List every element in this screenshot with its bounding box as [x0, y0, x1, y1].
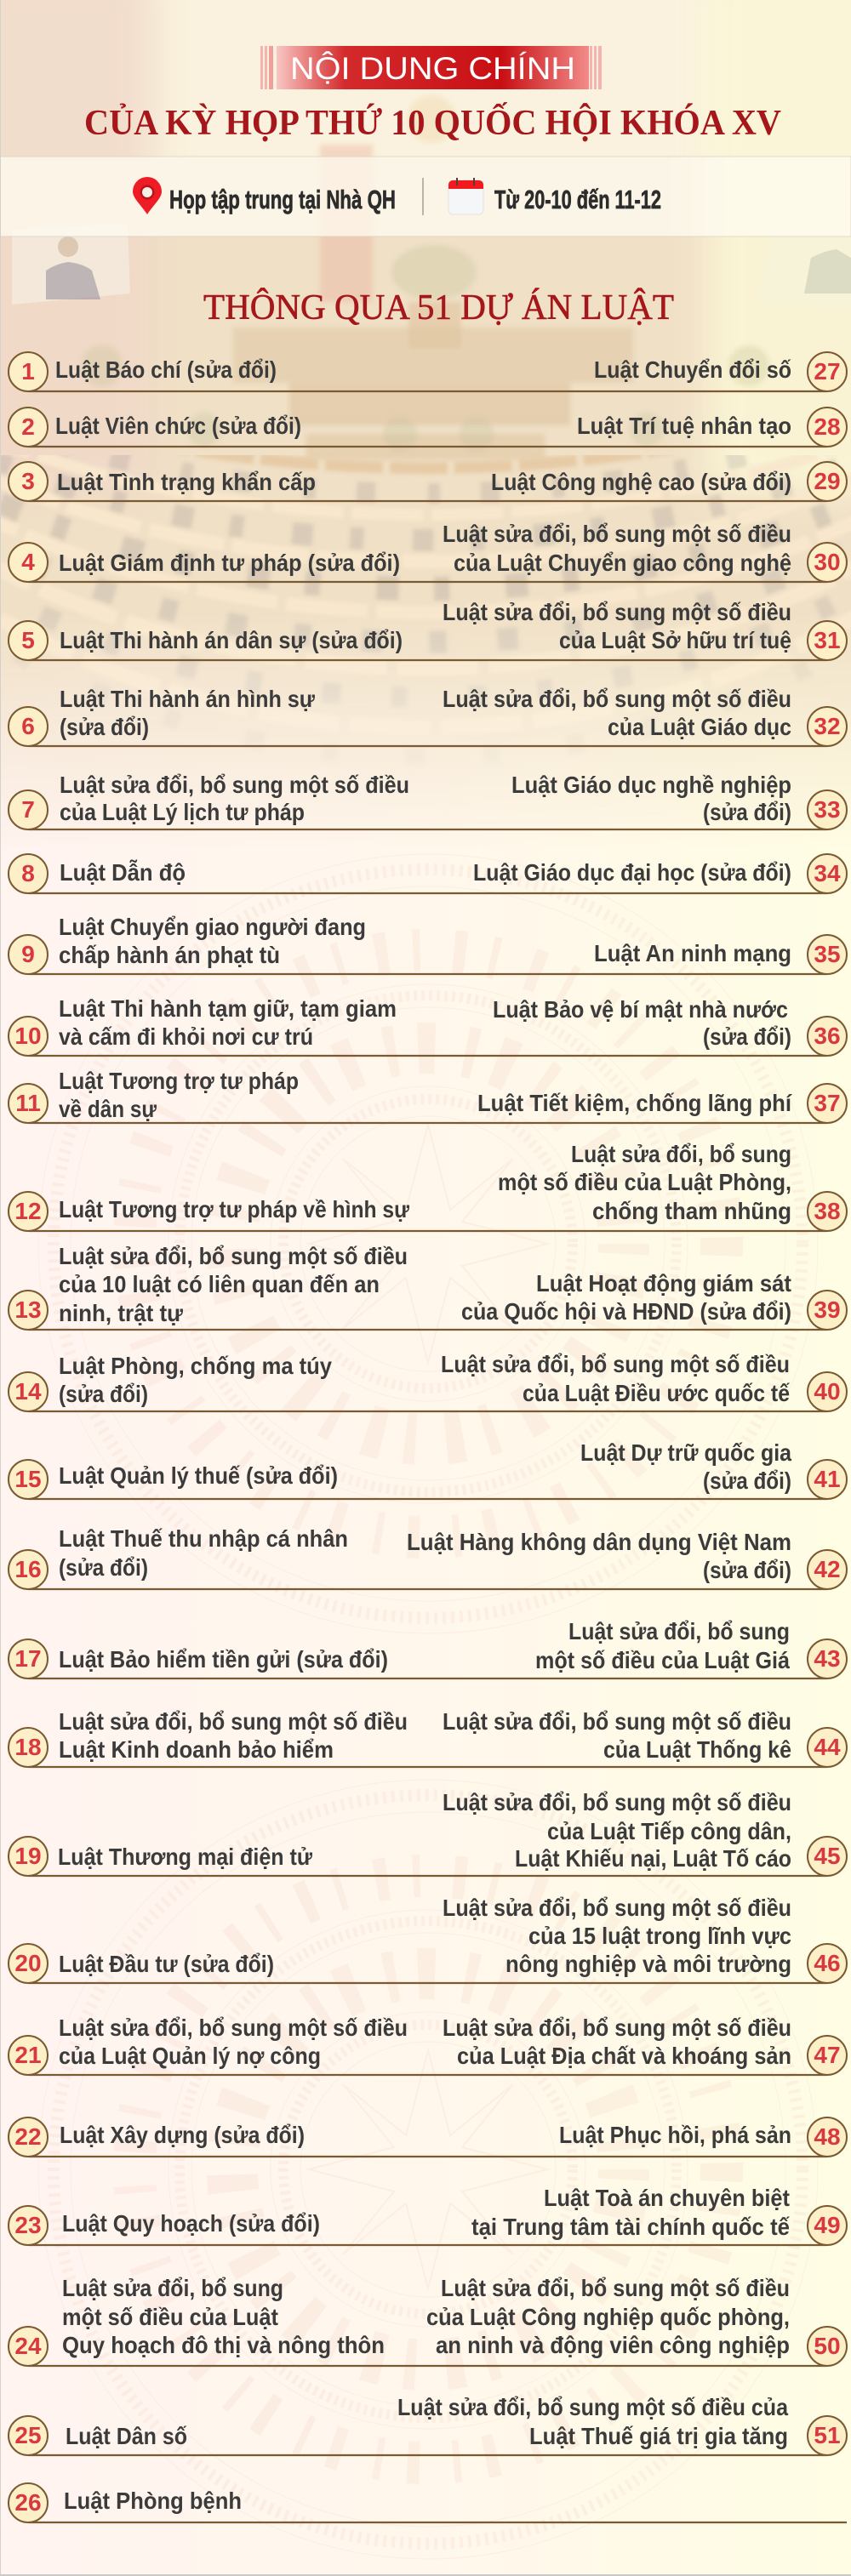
law 26: Luật Phòng bệnh: [64, 2488, 242, 2514]
law 24: 24: [14, 2333, 42, 2359]
law 32: Luật sửa đổi, bổ sung một số điều: [443, 686, 791, 712]
law 24: Quy hoạch đô thị và nông thôn: [62, 2332, 385, 2358]
law 44: Luật sửa đổi, bổ sung một số điều: [443, 1708, 791, 1735]
law 5: 5: [21, 627, 35, 653]
law 9: 9: [21, 941, 35, 967]
law 28: [577, 407, 847, 447]
law 50: [426, 2275, 847, 2366]
law 14: 14: [14, 1378, 42, 1405]
law 2: [9, 407, 301, 447]
law 18: Luật sửa đổi, bổ sung một số điều: [59, 1708, 408, 1735]
law 33: (sửa đổi): [703, 799, 791, 825]
row: laws 6 and 32: [9, 686, 847, 746]
law 45: 45: [814, 1843, 841, 1869]
law 28: 28: [814, 413, 841, 440]
section heading: THÔNG QUA 51 DỰ ÁN LUẬT: [203, 288, 674, 328]
law 38: [498, 1141, 847, 1231]
law 30: [443, 521, 847, 582]
law 21: 21: [14, 2042, 42, 2068]
location text: Họp tập trung tại Nhà QH: [169, 185, 396, 214]
law 51: Luật sửa đổi, bổ sung một số điều của: [397, 2394, 789, 2420]
law 21: [9, 2015, 408, 2075]
law 39: 39: [814, 1297, 841, 1323]
law 48: 48: [814, 2123, 841, 2150]
law 9: Luật Chuyển giao người đang: [59, 914, 366, 940]
header banner: NỘI DUNG CHÍNH: [290, 51, 575, 86]
law 23: Luật Quy hoạch (sửa đổi): [62, 2210, 320, 2237]
law 14: (sửa đổi): [59, 1381, 148, 1407]
background: bronze drum patterns: [38, 854, 818, 2559]
law 48: Luật Phục hồi, phá sản: [559, 2122, 791, 2148]
law 16: (sửa đổi): [59, 1554, 148, 1581]
law 41: 41: [814, 1466, 841, 1492]
law 34: 34: [814, 860, 841, 886]
row: laws 11 and 37: [9, 1068, 847, 1123]
law 22: 22: [14, 2123, 42, 2150]
law 18: Luật Kinh doanh bảo hiểm: [59, 1736, 334, 1763]
row: laws 13 and 39: [9, 1243, 847, 1330]
law 44: 44: [814, 1734, 841, 1760]
law 49: tại Trung tâm tài chính quốc tế: [471, 2214, 791, 2240]
law 51: 51: [814, 2422, 841, 2448]
law 37: Luật Tiết kiệm, chống lãng phí: [477, 1090, 792, 1116]
row: laws 24 and 50: [9, 2275, 847, 2366]
law 4: 4: [21, 549, 35, 575]
law 12: Luật Tương trợ tư pháp về hình sự: [59, 1196, 409, 1222]
law 31: 31: [814, 627, 841, 653]
law 12: [9, 1192, 409, 1231]
law 36: Luật Bảo vệ bí mật nhà nước: [493, 996, 788, 1023]
law 19: [9, 1837, 312, 1876]
law 20: [9, 1944, 274, 1983]
row: laws 10 and 36: [9, 995, 847, 1056]
law 10: và cấm đi khỏi nơi cư trú: [59, 1023, 313, 1050]
row: laws 9 and 35: [9, 914, 847, 974]
law 7: Luật sửa đổi, bổ sung một số điều: [60, 772, 409, 798]
law 17: [9, 1639, 388, 1678]
law 26: 26: [14, 2489, 42, 2516]
law 46: Luật sửa đổi, bổ sung một số điều: [443, 1895, 791, 1921]
date text: Từ 20-10 đến 11-12: [494, 185, 661, 214]
law 3: Luật Tình trạng khẩn cấp: [57, 469, 316, 495]
law 34: Luật Giáo dục đại học (sửa đổi): [473, 859, 791, 886]
law 24: [9, 2275, 385, 2366]
law 49: Luật Toà án chuyên biệt: [544, 2185, 790, 2211]
law 15: [9, 1460, 338, 1499]
row: laws 4 and 30: [9, 521, 847, 582]
law 16: 16: [14, 1556, 42, 1582]
law 32: [443, 686, 847, 746]
law 15: Luật Quản lý thuế (sửa đổi): [59, 1462, 338, 1489]
law 43: Luật sửa đổi, bổ sung: [568, 1618, 790, 1644]
law 2: 2: [21, 413, 35, 440]
law 31: của Luật Sở hữu trí tuệ: [559, 627, 791, 653]
law 10: 10: [14, 1023, 42, 1049]
law 1: 1: [21, 358, 35, 385]
row: laws 15 and 41: [9, 1439, 847, 1499]
law 44: [443, 1708, 847, 1767]
law 23: 23: [14, 2212, 42, 2238]
law 25: 25: [14, 2422, 42, 2448]
law 13: Luật sửa đổi, bổ sung một số điều: [59, 1243, 408, 1269]
law 22: [9, 2117, 305, 2157]
row: laws 25 and 51: [9, 2394, 847, 2455]
row: laws 7 and 33: [9, 772, 847, 829]
law 13: ninh, trật tự: [59, 1300, 183, 1326]
law 6: Luật Thi hành án hình sự: [60, 686, 315, 712]
location and date band: [0, 157, 851, 237]
law 17: 17: [14, 1645, 42, 1672]
law 49: 49: [814, 2212, 841, 2238]
law 50: an ninh và động viên công nghiệp: [436, 2332, 790, 2358]
law 18: [9, 1708, 408, 1767]
law 29: 29: [814, 468, 841, 494]
icon: location pin: [133, 177, 162, 214]
law 46: nông nghiệp và môi trường: [505, 1951, 791, 1977]
law 39: [461, 1270, 847, 1330]
law 8: 8: [21, 860, 35, 886]
law 45: Luật Khiếu nại, Luật Tố cáo: [515, 1845, 791, 1872]
law 19: Luật Thương mại điện tử: [58, 1844, 312, 1870]
law 47: 47: [814, 2042, 841, 2068]
law 11: 11: [15, 1090, 41, 1116]
law 40: Luật sửa đổi, bổ sung một số điều: [441, 1351, 790, 1377]
background: assembly hall photo: [0, 0, 851, 851]
law 30: 30: [814, 549, 841, 575]
row: laws 17 and 43: [9, 1618, 847, 1678]
law 10: [9, 995, 397, 1056]
icon: calendar: [448, 178, 483, 214]
law 47: [443, 2015, 847, 2075]
law 38: 38: [814, 1198, 841, 1224]
law 28: Luật Trí tuệ nhân tạo: [577, 413, 791, 439]
law 36: (sửa đổi): [703, 1023, 791, 1050]
law 46: 46: [814, 1950, 841, 1976]
law 3: [9, 462, 316, 501]
law 15: 15: [14, 1466, 42, 1492]
law 11: [9, 1068, 299, 1123]
law 20: Luật Đầu tư (sửa đổi): [59, 1951, 274, 1977]
law 9: [9, 914, 366, 974]
law 42: [407, 1529, 847, 1589]
law 3: 3: [21, 468, 35, 494]
law 32: 32: [814, 713, 841, 739]
law 50: Luật sửa đổi, bổ sung một số điều: [441, 2275, 790, 2301]
law 11: về dân sự: [59, 1096, 157, 1122]
law 42: 42: [814, 1556, 841, 1582]
law 24: một số điều của Luật: [62, 2304, 278, 2330]
law 6: [9, 686, 315, 746]
law 39: của Quốc hội và HĐND (sửa đổi): [461, 1298, 791, 1325]
law 50: của Luật Công nghiệp quốc phòng,: [426, 2304, 790, 2330]
law 37: 37: [814, 1090, 841, 1116]
law 24: Luật sửa đổi, bổ sung: [62, 2275, 283, 2301]
law 23: [9, 2206, 320, 2245]
law 38: Luật sửa đổi, bổ sung: [571, 1141, 791, 1167]
row: laws 23 and 49: [9, 2185, 847, 2245]
law 51: Luật Thuế giá trị gia tăng: [529, 2423, 788, 2449]
law 36: [493, 996, 847, 1056]
law 18: 18: [14, 1734, 42, 1760]
law 33: 33: [814, 796, 841, 823]
law 45: Luật sửa đổi, bổ sung một số điều: [443, 1789, 791, 1815]
row: law 26: [9, 2483, 847, 2522]
law 29: Luật Công nghệ cao (sửa đổi): [491, 469, 791, 495]
law 42: Luật Hàng không dân dụng Việt Nam: [407, 1529, 791, 1555]
law 20: 20: [14, 1950, 42, 1976]
law 7: [9, 772, 409, 829]
law 4: [9, 543, 400, 582]
law 40: của Luật Điều ước quốc tế: [523, 1380, 791, 1406]
row: laws 3 and 29: [9, 462, 847, 501]
law 47: Luật sửa đổi, bổ sung một số điều: [443, 2015, 791, 2041]
law 42: (sửa đổi): [703, 1557, 791, 1583]
law 27: 27: [814, 358, 841, 385]
law 30: của Luật Chuyển giao công nghệ: [454, 550, 791, 576]
law 6: (sửa đổi): [60, 714, 149, 740]
law 2: Luật Viên chức (sửa đổi): [55, 413, 301, 439]
law 47: của Luật Địa chất và khoáng sản: [457, 2043, 791, 2069]
law 41: Luật Dự trữ quốc gia: [580, 1439, 792, 1466]
law 35: Luật An ninh mạng: [594, 940, 791, 966]
law 49: [471, 2185, 847, 2245]
row: laws 21 and 47: [9, 2015, 847, 2075]
row: laws 1 and 27: [9, 352, 847, 391]
law 13: của 10 luật có liên quan đến an: [59, 1271, 380, 1297]
law 25: [9, 2416, 187, 2455]
header banner: [260, 46, 602, 89]
row: laws 19 and 45: [9, 1789, 847, 1876]
law 36: 36: [814, 1023, 841, 1049]
law 31: Luật sửa đổi, bổ sung một số điều: [443, 599, 791, 625]
row: laws 16 and 42: [9, 1525, 847, 1589]
row: laws 14 and 40: [9, 1351, 847, 1411]
row: laws 12 and 38: [9, 1141, 847, 1231]
law 14: [9, 1353, 333, 1411]
law 21: Luật sửa đổi, bổ sung một số điều: [59, 2015, 408, 2041]
law 1: Luật Báo chí (sửa đổi): [55, 356, 277, 383]
law 35: 35: [814, 941, 841, 967]
row: laws 2 and 28: [9, 407, 847, 447]
law 40: 40: [814, 1378, 841, 1405]
law 13: [9, 1243, 408, 1330]
law 30: Luật sửa đổi, bổ sung một số điều: [443, 521, 791, 547]
law 34: [473, 854, 847, 893]
law 43: 43: [814, 1645, 841, 1672]
row: laws 8 and 34: [9, 854, 847, 893]
law 16: [9, 1525, 348, 1589]
row: laws 22 and 48: [9, 2117, 847, 2157]
law 50: 50: [814, 2333, 841, 2359]
law 37: [477, 1084, 847, 1123]
law 9: chấp hành án phạt tù: [59, 942, 280, 968]
law 29: [491, 462, 847, 501]
law 8: [9, 854, 186, 893]
law 41: [580, 1439, 847, 1499]
law 17: Luật Bảo hiểm tiền gửi (sửa đổi): [59, 1646, 388, 1673]
row: laws 18 and 44: [9, 1708, 847, 1767]
law 27: Luật Chuyển đổi số: [594, 356, 791, 383]
law 5: [9, 621, 403, 660]
law 7: 7: [21, 796, 35, 823]
law 32: của Luật Giáo dục: [608, 714, 791, 740]
law 13: 13: [14, 1297, 42, 1323]
law 27: [594, 352, 847, 391]
law 35: [594, 935, 847, 974]
law 4: Luật Giám định tư pháp (sửa đổi): [59, 550, 400, 576]
law 43: [535, 1618, 847, 1678]
law 33: [511, 772, 847, 829]
law 33: Luật Giáo dục nghề nghiệp: [511, 772, 791, 798]
law 25: Luật Dân số: [66, 2423, 187, 2449]
law 6: 6: [21, 713, 35, 739]
law 19: 19: [14, 1843, 42, 1869]
law 22: Luật Xây dựng (sửa đổi): [60, 2122, 305, 2148]
law 38: một số điều của Luật Phòng,: [498, 1169, 791, 1195]
row: laws 20 and 46: [9, 1895, 847, 1983]
law 14: Luật Phòng, chống ma túy: [59, 1353, 333, 1379]
law 1: [9, 352, 277, 391]
row: laws 5 and 31: [9, 599, 847, 660]
law 45: của Luật Tiếp công dân,: [547, 1818, 791, 1844]
law 12: 12: [14, 1198, 42, 1224]
law 11: Luật Tương trợ tư pháp: [59, 1068, 299, 1094]
law 8: Luật Dẫn độ: [60, 859, 186, 886]
law 40: [441, 1351, 847, 1411]
law 26: [9, 2483, 242, 2522]
law 39: Luật Hoạt động giám sát: [536, 1270, 791, 1297]
law 44: của Luật Thống kê: [603, 1736, 791, 1763]
law 21: của Luật Quản lý nợ công: [59, 2043, 321, 2069]
law 46: của 15 luật trong lĩnh vực: [528, 1923, 791, 1949]
law 7: của Luật Lý lịch tư pháp: [60, 799, 305, 825]
law 45: [443, 1789, 847, 1876]
law 10: Luật Thi hành tạm giữ, tạm giam: [59, 995, 397, 1022]
law 16: Luật Thuế thu nhập cá nhân: [59, 1525, 348, 1552]
law 48: [559, 2117, 847, 2157]
title: CỦA KỲ HỌP THỨ 10 QUỐC HỘI KHÓA XV: [84, 102, 781, 143]
law 5: Luật Thi hành án dân sự (sửa đổi): [60, 627, 403, 653]
law 51: [397, 2394, 847, 2455]
law 46: [443, 1895, 847, 1983]
law 41: (sửa đổi): [703, 1468, 791, 1494]
law 43: một số điều của Luật Giá: [535, 1647, 791, 1673]
law 31: [443, 599, 847, 660]
law 38: chống tham nhũng: [592, 1198, 791, 1224]
